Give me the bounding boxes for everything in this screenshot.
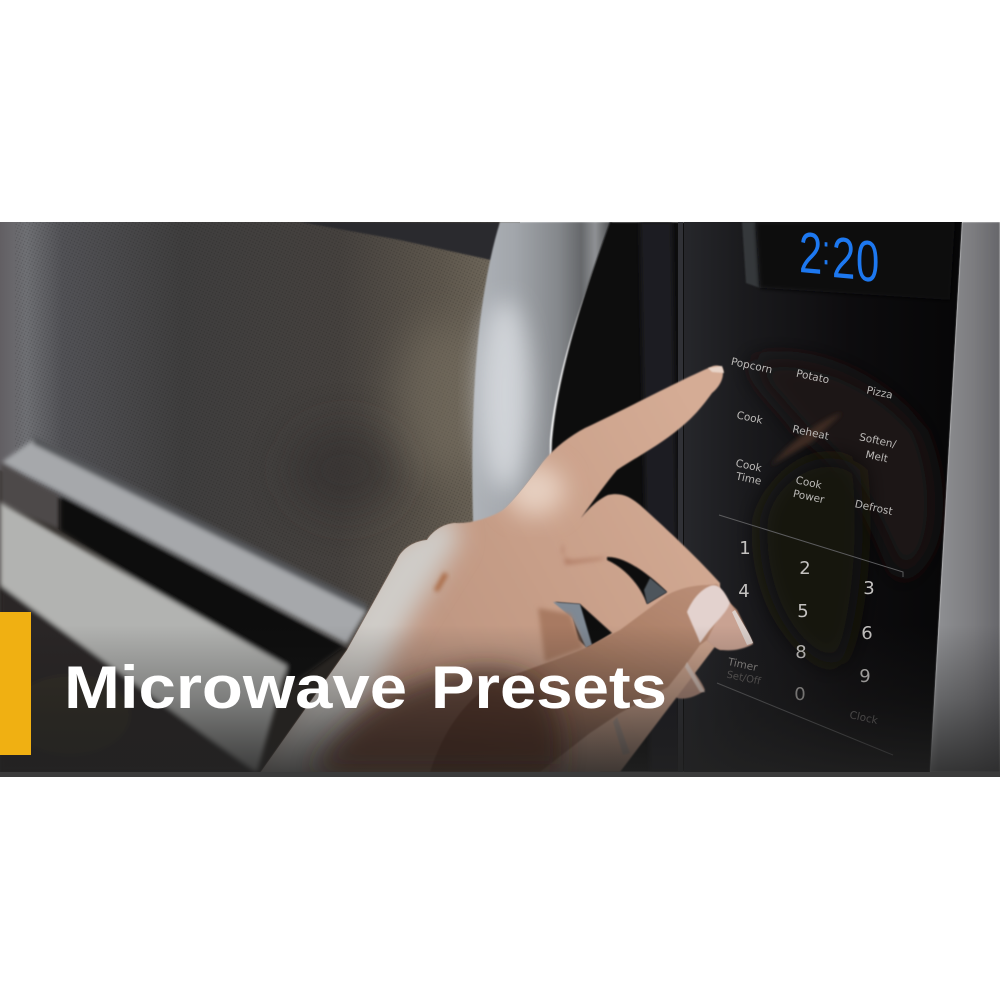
panel keypad numbers: 8: [795, 642, 807, 663]
panel keypad numbers: 1: [739, 538, 751, 559]
panel labels: Pizza: [865, 384, 894, 402]
panel labels: Timer: [726, 656, 759, 674]
gap near palm: [555, 602, 612, 648]
hand: [240, 365, 753, 790]
ring glimpse between fingers: [644, 578, 667, 604]
panel labels: Popcorn: [730, 356, 773, 376]
door ring: [471, 222, 612, 522]
fingernail: pointing: [708, 366, 724, 373]
oven door window: [0, 222, 520, 772]
yellow accent block: [0, 612, 31, 755]
ring highlight: [479, 300, 531, 490]
panel labels: Cook: [795, 474, 824, 492]
title: Microwave: [64, 654, 407, 721]
panel labels: Power: [792, 488, 826, 506]
digital display: :: [822, 226, 830, 274]
panel labels: Defrost: [854, 498, 894, 518]
bottom dark gradient: [0, 625, 1000, 772]
panel keypad numbers: 2: [799, 558, 811, 579]
digital display: 2: [799, 219, 822, 287]
palm shading: [538, 608, 584, 662]
silver seen through gap: [553, 602, 592, 648]
panel keypad numbers: 5: [797, 601, 809, 622]
digital display: 2: [832, 224, 855, 292]
panel labels: [725, 356, 898, 727]
bottom edge band: [0, 772, 1000, 777]
finger crease shadow: [562, 548, 603, 566]
fingernail: little: [614, 718, 628, 754]
pale light on forearm and knuckles: [240, 464, 565, 790]
digital display: [801, 232, 878, 282]
keypad divider lines: [717, 515, 903, 755]
panel labels: Clock: [848, 709, 880, 727]
control panel: [684, 222, 962, 772]
little finger: [585, 717, 630, 757]
door handle bars: [0, 436, 367, 772]
panel labels: Soften/: [858, 431, 898, 451]
panel keypad numbers: 0: [794, 684, 806, 705]
gap between middle and ring fingers: [607, 557, 667, 604]
microwave photo: [0, 219, 1000, 790]
panel labels: Potato: [795, 368, 830, 386]
banner scene with title: [0, 222, 1000, 777]
fingernail: front: [687, 585, 730, 643]
panel labels: Set/Off: [725, 670, 763, 688]
digital display: 0: [856, 227, 879, 295]
title: Presets: [431, 654, 667, 721]
panel labels: Reheat: [791, 423, 830, 443]
panel keypad numbers: 9: [859, 666, 871, 687]
gap between door and panel: [552, 222, 690, 772]
panel keypad numbers: 4: [738, 581, 750, 602]
front finger: [430, 584, 753, 772]
panel keypad numbers: [738, 538, 875, 705]
panel labels: Time: [734, 470, 762, 488]
knuckle crease: [434, 572, 448, 592]
panel labels: Cook: [736, 409, 765, 427]
fingernail: ring: [685, 662, 705, 692]
fingertip: [707, 603, 753, 650]
back of hand and pointing finger: [260, 365, 723, 773]
panel keypad numbers: 6: [861, 623, 873, 644]
panel keypad numbers: 3: [863, 578, 875, 599]
stainless side strip: [930, 222, 1000, 772]
ring fingertip: [676, 672, 706, 700]
panel labels: Cook: [735, 457, 764, 475]
panel labels: Melt: [864, 449, 889, 465]
title: [64, 654, 667, 721]
long nail edge: [732, 610, 753, 645]
panel reflections: [640, 222, 955, 772]
dark lower hand shadow: [310, 669, 561, 772]
